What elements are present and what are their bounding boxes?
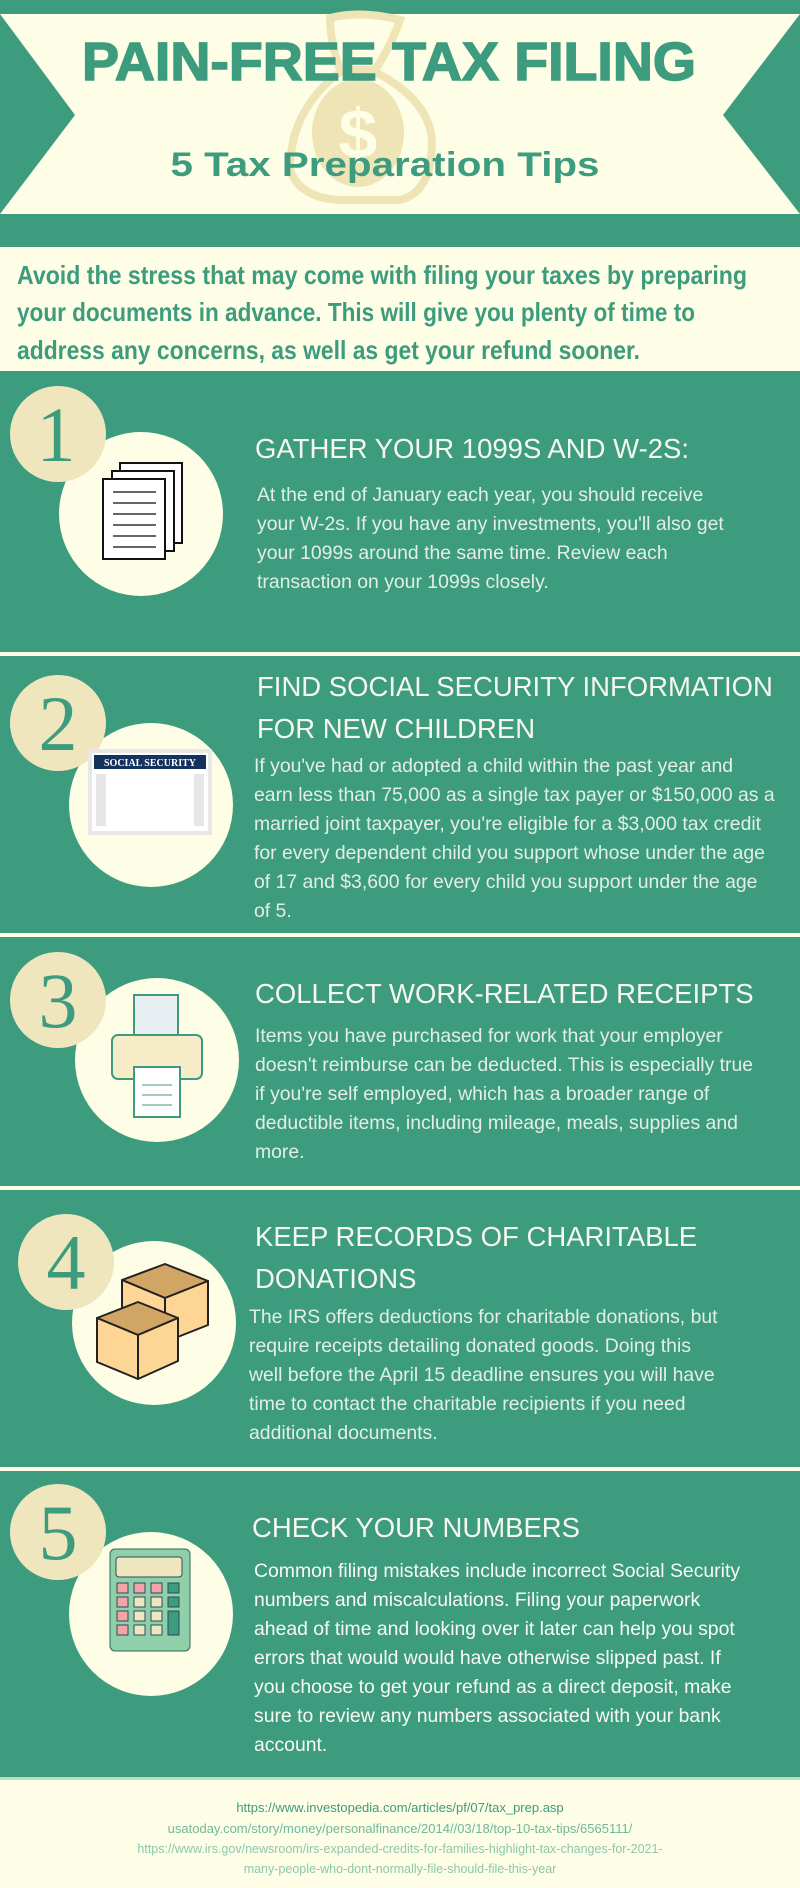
body 4: well before the April 15 deadline ensures you will have	[249, 1364, 715, 1386]
body 5	[254, 1560, 740, 1756]
heading 4: DONATIONS	[255, 1263, 416, 1294]
body 1: transaction on your 1099s closely.	[257, 571, 549, 593]
body 4: time to contact the charitable recipients if you need	[249, 1393, 686, 1415]
heading 4	[255, 1221, 697, 1294]
body 1: your 1099s around the same time. Review each	[257, 542, 668, 564]
title: PAIN-FREE TAX FILING	[82, 32, 696, 92]
body 3: Items you have purchased for work that your employer	[255, 1025, 723, 1047]
intro text: address any concerns, as well as get your refund sooner.	[17, 335, 640, 365]
panel: tip 2	[10, 671, 775, 922]
icon: calculator: 5	[38, 1489, 78, 1576]
heading 4: KEEP RECORDS OF CHARITABLE	[255, 1221, 697, 1252]
footer sources: many-people-who-dont-normally-file-should-file-this-year	[244, 1862, 556, 1876]
footer sources	[0, 1777, 800, 1888]
body 2	[254, 755, 775, 922]
body 3: deductible items, including mileage, meals, supplies and	[255, 1112, 738, 1134]
icon: money bag watermark	[290, 14, 432, 200]
body 2: of 5.	[254, 900, 292, 922]
heading 1: GATHER YOUR 1099S AND W-2S:	[255, 433, 689, 464]
body 5: errors that would would have otherwise slipped past. If	[254, 1647, 721, 1669]
body 5: account.	[254, 1734, 327, 1756]
footer sources: https://www.irs.gov/newsroom/irs-expanded-credits-for-families-highlight-tax-changes-for-2021-	[137, 1842, 663, 1856]
body 2: of 17 and $3,600 for every child you support under the age	[254, 871, 757, 893]
body 5: you choose to get your refund as a direct deposit, make	[254, 1676, 732, 1698]
body 2: married joint taxpayer, you're eligible for a $3,000 tax credit	[254, 813, 761, 835]
icon: documents	[10, 386, 223, 596]
body 4	[249, 1306, 718, 1444]
body 4: additional documents.	[249, 1422, 438, 1444]
heading 2: FIND SOCIAL SECURITY INFORMATION	[257, 671, 773, 702]
icon: social security card	[10, 675, 233, 887]
footer sources: usatoday.com/story/money/personalfinance/2014//03/18/top-10-tax-tips/6565111/	[168, 1821, 632, 1836]
icon: money bag watermark: $	[339, 95, 377, 173]
heading 5: CHECK YOUR NUMBERS	[252, 1512, 580, 1543]
header banner	[0, 10, 800, 214]
icon: boxes	[18, 1214, 236, 1405]
icon: calculator	[10, 1484, 233, 1696]
body 5: Common filing mistakes include incorrect Social Security	[254, 1560, 740, 1582]
icon: printer: 3	[38, 957, 78, 1044]
footer sources: https://www.investopedia.com/articles/pf/07/tax_prep.asp	[236, 1800, 564, 1815]
body 4: The IRS offers deductions for charitable donations, but	[249, 1306, 718, 1328]
body 1	[257, 484, 724, 593]
body 3: more.	[255, 1141, 305, 1163]
body 3	[255, 1025, 753, 1163]
intro text	[0, 247, 800, 371]
panel: tip 4	[18, 1214, 718, 1444]
panel: tip 3	[10, 952, 754, 1163]
icon: documents: 1	[36, 391, 76, 478]
body 1: your W-2s. If you have any investments, you'll also get	[257, 513, 724, 535]
icon: social security card: SOCIAL SECURITY	[104, 758, 197, 769]
icon: printer	[10, 952, 239, 1142]
intro text: your documents in advance. This will give you plenty of time to	[17, 297, 695, 327]
body 2: If you've had or adopted a child within the past year and	[254, 755, 733, 777]
body 1: At the end of January each year, you should receive	[257, 484, 703, 506]
heading 3: COLLECT WORK-RELATED RECEIPTS	[255, 978, 754, 1009]
heading 2	[257, 671, 773, 744]
panel: tip 1	[10, 386, 724, 596]
body 2: earn less than 75,000 as a single tax payer or $150,000 as a	[254, 784, 775, 806]
body 3: if you're self employed, which has a broader range of	[255, 1083, 709, 1105]
panel: tip 5	[10, 1484, 740, 1756]
body 2: for every dependent child you support whose under the age	[254, 842, 765, 864]
body 4: require receipts detailing donated goods. Doing this	[249, 1335, 691, 1357]
icon: social security card: 2	[38, 680, 78, 767]
body 5: sure to review any numbers associated with your bank	[254, 1705, 721, 1727]
icon: boxes: 4	[46, 1219, 86, 1306]
heading 2: FOR NEW CHILDREN	[257, 713, 535, 744]
subtitle: 5 Tax Preparation Tips	[170, 146, 600, 184]
body 5: numbers and miscalculations. Filing your paperwork	[254, 1589, 700, 1611]
body 5: ahead of time and looking over it later can help you spot	[254, 1618, 735, 1640]
body 3: doesn't reimburse can be deducted. This is especially true	[255, 1054, 753, 1076]
